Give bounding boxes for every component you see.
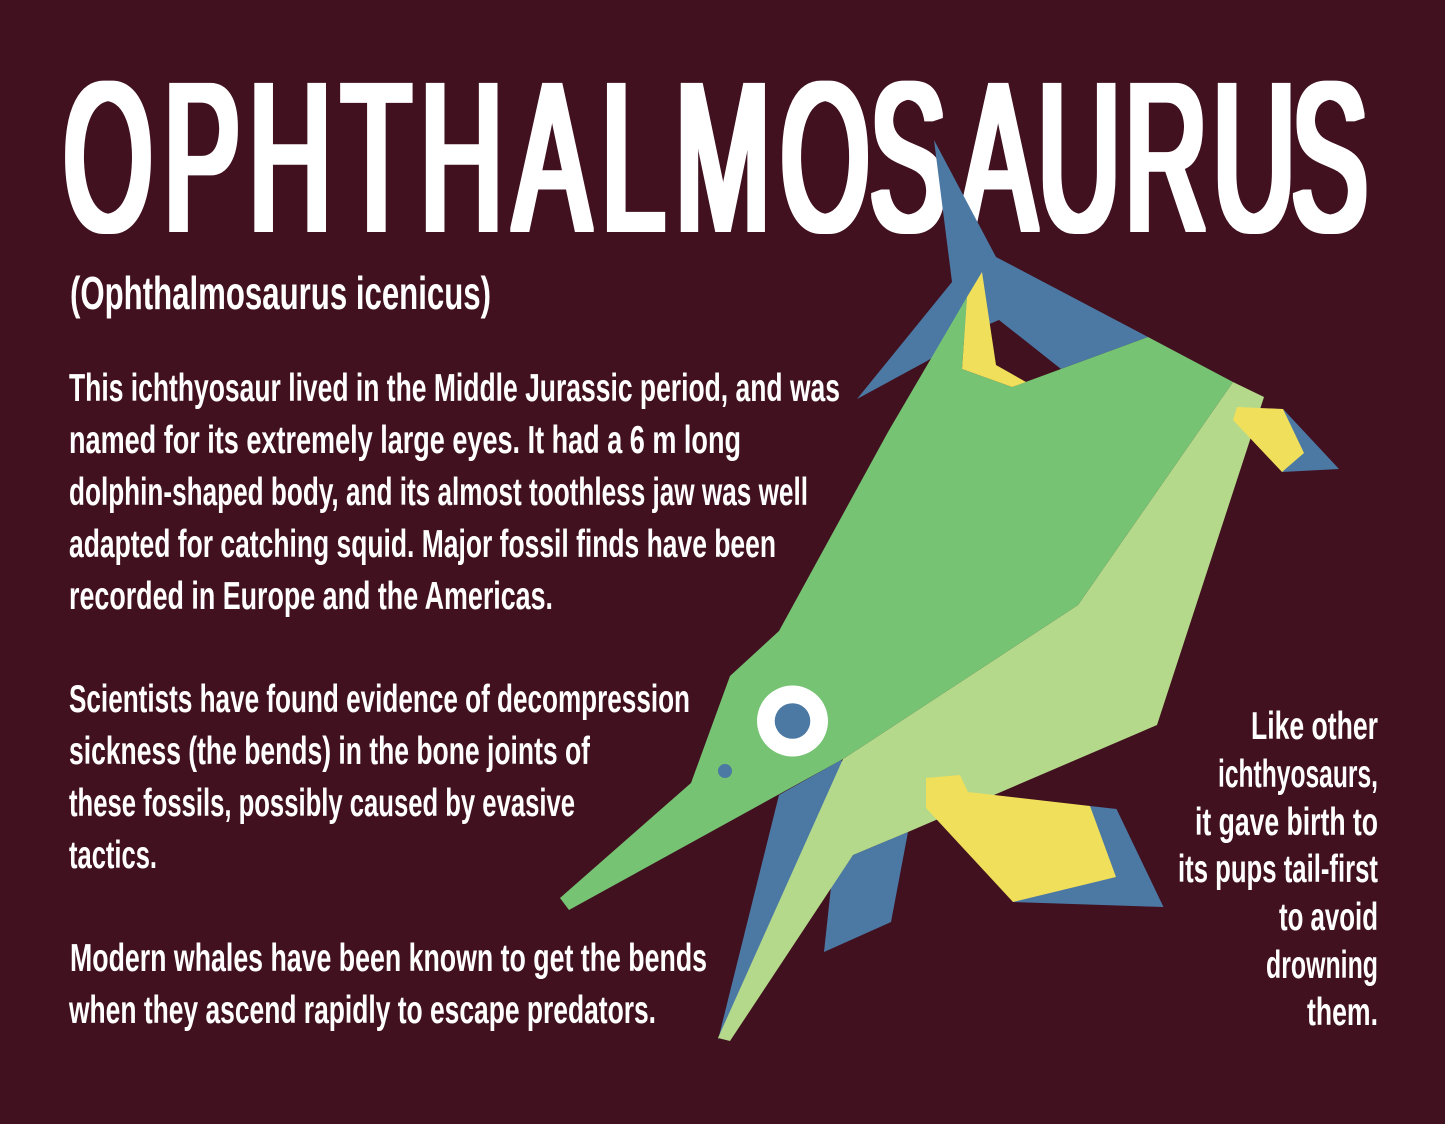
text block: birth note: to avoid — [1279, 896, 1378, 939]
text block: description: recorded in Europe and the Americas. — [69, 575, 553, 618]
tail fin — [857, 140, 1148, 399]
text block: birth note: them. — [1307, 991, 1378, 1034]
text block: modern whales: when they ascend rapidly to escape predators. — [68, 989, 656, 1032]
text block: birth note — [1178, 705, 1378, 1034]
text block: decompression sickness: sickness (the bends) in the bone joints of — [69, 730, 591, 773]
text block: decompression sickness — [69, 678, 690, 877]
text block: description: This ichthyosaur lived in the Middle Jurassic period, and was — [69, 367, 840, 410]
eye — [757, 686, 828, 756]
text block: birth note: drowning — [1266, 944, 1378, 987]
body — [560, 297, 1233, 910]
text block: birth note: Like other — [1251, 705, 1378, 748]
subtitle: species name: (Ophthalmosaurus icenicus) — [70, 267, 491, 319]
text block: modern whales: Modern whales have been known to get the bends — [70, 937, 707, 980]
front flipper back — [1013, 806, 1164, 907]
rear right flipper back — [1282, 409, 1339, 472]
rear flipper — [1233, 407, 1304, 472]
front flipper — [926, 775, 1116, 902]
illustration: ichthyosaur — [560, 140, 1339, 1041]
nostril — [718, 764, 732, 778]
text block: description: adapted for catching squid. Major fossil finds have been — [69, 523, 776, 566]
text block: description: dolphin-shaped body, and its almost toothless jaw was well — [69, 471, 808, 514]
text block: decompression sickness: Scientists have found evidence of decompression — [69, 678, 690, 721]
belly — [718, 382, 1264, 1041]
text block: decompression sickness: these fossils, possibly caused by evasive — [69, 782, 575, 825]
text block: description: named for its extremely large eyes. It had a 6 m long — [69, 419, 741, 462]
dorsal fin — [962, 272, 1026, 387]
small lower fin — [824, 832, 908, 952]
lower fin — [718, 760, 860, 1040]
text block: modern whales — [68, 937, 707, 1032]
text block: decompression sickness: tactics. — [69, 834, 157, 877]
text block: description — [69, 367, 840, 618]
title: OPHTHALMOSAURUS — [64, 40, 1368, 275]
